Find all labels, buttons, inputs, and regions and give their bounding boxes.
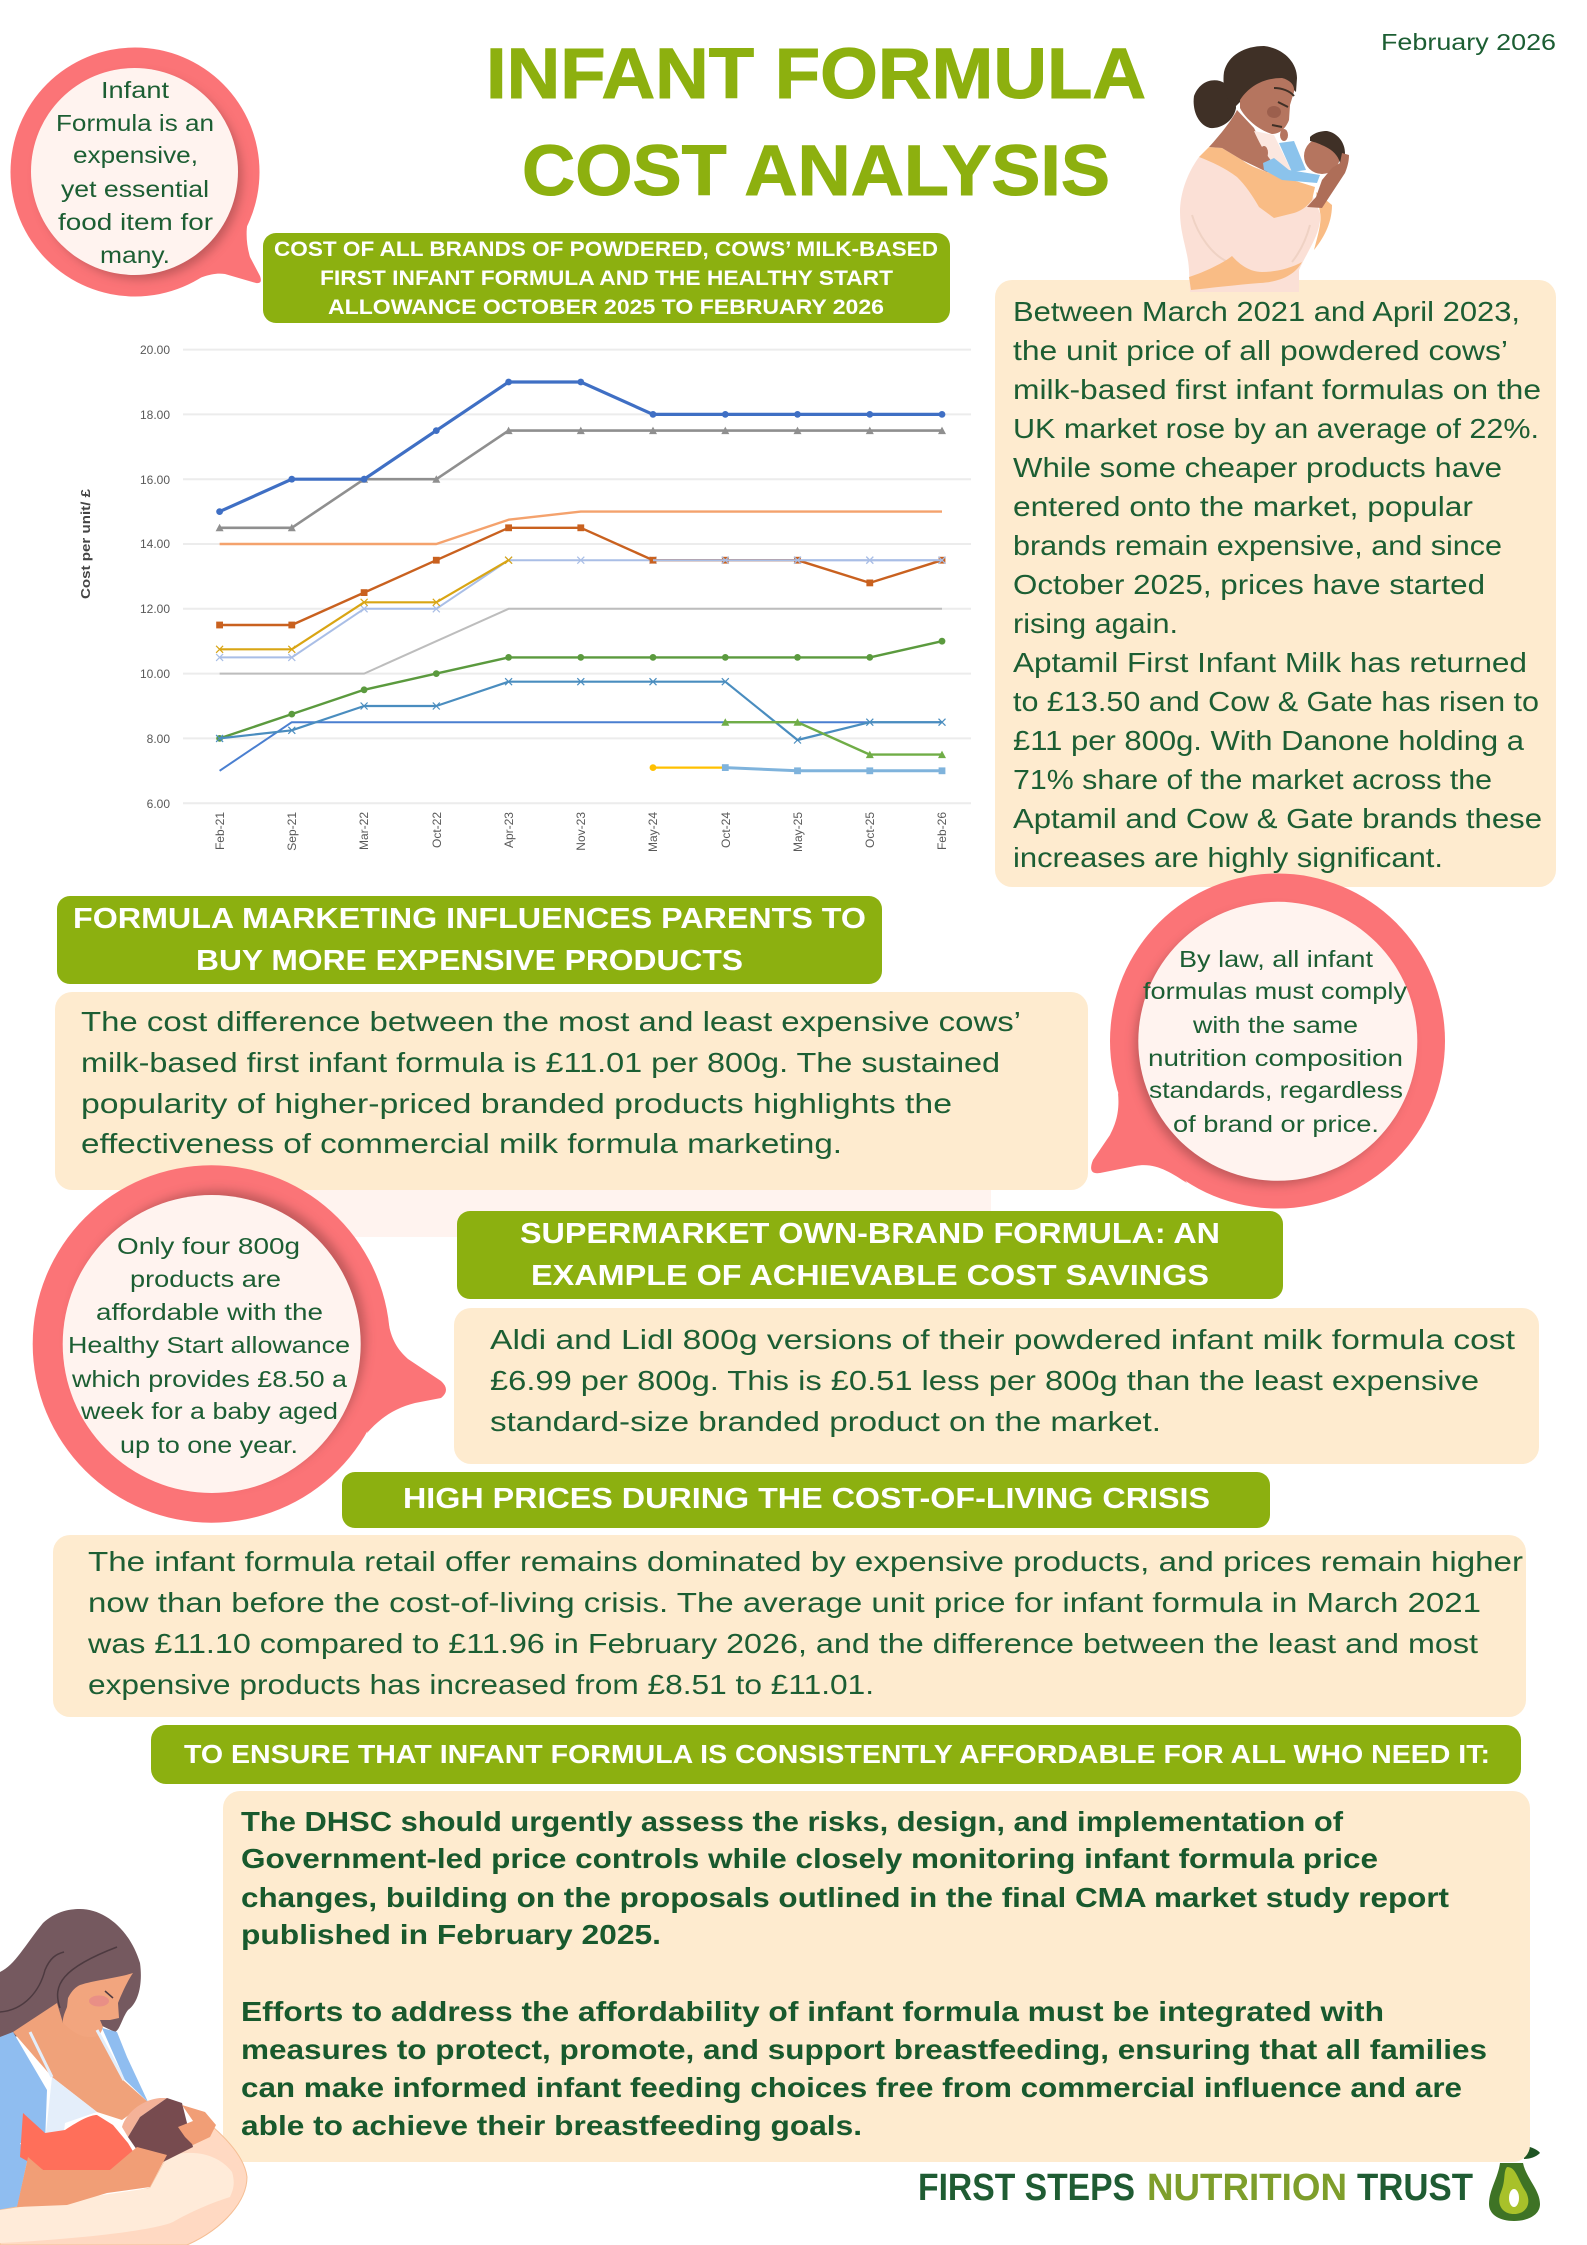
line chart: cost per unit by brand: Cost per unit/ £: [78, 488, 93, 599]
callout: Healthy Start allowance: Only four 800g: [117, 1233, 300, 1259]
callout: Healthy Start allowance: Healthy Start allowance: [68, 1332, 350, 1358]
line chart: cost per unit by brand: [78, 343, 971, 852]
panel: intro text: UK market rose by an average of 22%.: [1013, 413, 1539, 444]
line chart: cost per unit by brand: 12.00: [140, 602, 170, 616]
line chart: cost per unit by brand: 16.00: [140, 473, 170, 487]
callout: Healthy Start allowance: week for a baby aged: [80, 1398, 338, 1424]
panel: recommendations text: can make informed infant feeding choices free from commercial influence and are: [241, 2072, 1462, 2103]
icon: breastfeeding mother: [0, 1909, 247, 2245]
panel: intro text: 71% share of the market across the: [1013, 764, 1492, 795]
line chart: cost per unit by brand: Sep-21: [285, 812, 299, 851]
panel: intro text: the unit price of all powdered cows’: [1013, 335, 1508, 366]
panel: intro text: [995, 280, 1556, 887]
panel: cost difference text: The cost difference between the most and least expensive cows’: [81, 1006, 1021, 1037]
panel: recommendations text: able to achieve their breastfeeding goals.: [241, 2110, 862, 2141]
panel: intro text: milk-based first infant formulas on the: [1013, 374, 1541, 405]
line chart: cost per unit by brand: 8.00: [147, 732, 170, 746]
panel: intro text: Aptamil First Infant Milk has returned: [1013, 647, 1527, 678]
line chart: cost per unit by brand: Oct-25: [863, 812, 877, 848]
line chart: cost per unit by brand: 6.00: [147, 797, 170, 811]
line chart: cost per unit by brand: Apr-23: [502, 812, 516, 848]
panel: retail offer text: now than before the cost-of-living crisis. The average unit price for infant formula in March 2021: [88, 1587, 1481, 1618]
callout: Healthy Start allowance: products are: [130, 1266, 281, 1292]
panel: retail offer text: expensive products has increased from £8.51 to £11.01.: [88, 1669, 874, 1700]
line chart: cost per unit by brand: Oct-22: [430, 812, 444, 848]
callout: infant formula is expensive: food item for: [58, 209, 213, 235]
panel: recommendations text: Efforts to address the affordability of infant formula must be integrated with: [241, 1996, 1384, 2027]
panel: intro text: £11 per 800g. With Danone holding a: [1013, 725, 1524, 756]
callout: Healthy Start allowance: [33, 1165, 446, 1523]
callout: infant formula is expensive: [10, 48, 261, 296]
line chart: cost per unit by brand: 18.00: [140, 408, 170, 422]
icon: mother carrying baby in sling: [1180, 46, 1349, 292]
callout: infant formula is expensive: Formula is an: [56, 110, 214, 136]
line chart: cost per unit by brand: Mar-22: [357, 812, 371, 850]
panel: pale backing strip: [200, 1180, 991, 1237]
panel: intro text: brands remain expensive, and since: [1013, 530, 1502, 561]
callout: by law: [1091, 874, 1445, 1208]
logo: pear icon: [1489, 2163, 1540, 2221]
line chart: cost per unit by brand: Oct-24: [719, 812, 733, 848]
panel: Aldi and Lidl text: Aldi and Lidl 800g versions of their powdered infant milk formula cost: [490, 1324, 1515, 1355]
panel: intro text: to £13.50 and Cow & Gate has risen to: [1013, 686, 1539, 717]
line chart: cost per unit by brand: Feb-26: [935, 812, 949, 850]
panel: Aldi and Lidl text: standard-size branded product on the market.: [490, 1406, 1161, 1437]
line chart: cost per unit by brand: 10.00: [140, 667, 170, 681]
heading: supermarket own-brand: EXAMPLE OF ACHIEVABLE COST SAVINGS: [531, 1260, 1209, 1292]
callout: Healthy Start allowance: affordable with the: [96, 1299, 323, 1325]
title: INFANT FORMULA: [486, 35, 1146, 114]
panel: recommendations text: published in February 2025.: [241, 1919, 661, 1950]
line chart: cost per unit by brand: 14.00: [140, 537, 170, 551]
line chart: cost per unit by brand: May-24: [646, 812, 660, 852]
logo: First Steps Nutrition Trust wordmark: FIRST STEPS: [918, 2167, 1135, 2209]
heading: supermarket own-brand: SUPERMARKET OWN-BRAND FORMULA: AN: [520, 1218, 1220, 1250]
heading: formula marketing: FORMULA MARKETING INFLUENCES PARENTS TO: [73, 903, 866, 935]
heading: recommendations: [151, 1725, 1521, 1784]
panel: intro text: Between March 2021 and April 2023,: [1013, 296, 1520, 327]
panel: intro text: increases are highly significant.: [1013, 842, 1443, 873]
callout: infant formula is expensive: many.: [100, 242, 170, 268]
heading: chart title: ALLOWANCE OCTOBER 2025 TO FEBRUARY 2026: [328, 296, 884, 319]
callout: Healthy Start allowance: which provides £8.50 a: [71, 1366, 347, 1392]
panel: intro text: October 2025, prices have started: [1013, 569, 1485, 600]
heading: cost-of-living crisis: HIGH PRICES DURING THE COST-OF-LIVING CRISIS: [403, 1483, 1210, 1515]
callout: by law: nutrition composition: [1148, 1045, 1403, 1071]
panel: intro text: Aptamil and Cow & Gate brands these: [1013, 803, 1542, 834]
panel: cost difference text: popularity of higher-priced branded products highlights the: [81, 1088, 952, 1119]
panel: recommendations text: changes, building on the proposals outlined in the final CMA market study report: [241, 1882, 1449, 1913]
panel: recommendations text: [223, 1791, 1530, 2162]
title: [486, 35, 1146, 211]
panel: recommendations text: Government-led price controls while closely monitoring infant formula price: [241, 1843, 1378, 1874]
callout: by law: By law, all infant: [1179, 946, 1374, 972]
panel: Aldi and Lidl text: [454, 1308, 1539, 1464]
logo: First Steps Nutrition Trust wordmark: [918, 2167, 1473, 2209]
line chart: cost per unit by brand: 20.00: [140, 343, 170, 357]
callout: by law: formulas must comply: [1143, 978, 1408, 1004]
panel: intro text: While some cheaper products have: [1013, 452, 1502, 483]
line chart: cost per unit by brand: Feb-21: [213, 812, 227, 850]
line chart: cost per unit by brand: Nov-23: [574, 812, 588, 851]
panel: retail offer text: The infant formula retail offer remains dominated by expensive products, and prices remain higher: [88, 1546, 1523, 1577]
panel: cost difference text: [55, 992, 1088, 1190]
heading: formula marketing: BUY MORE EXPENSIVE PRODUCTS: [196, 945, 743, 977]
panel: intro text: entered onto the market, popular: [1013, 491, 1473, 522]
date: February 2026: [1381, 29, 1556, 55]
callout: by law: with the same: [1192, 1012, 1358, 1038]
callout: infant formula is expensive: yet essential: [61, 176, 209, 202]
panel: recommendations text: The DHSC should urgently assess the risks, design, and implementation of: [241, 1806, 1344, 1837]
panel: retail offer text: was £11.10 compared to £11.96 in February 2026, and the difference between the least and most: [87, 1628, 1478, 1659]
heading: recommendations: TO ENSURE THAT INFANT FORMULA IS CONSISTENTLY AFFORDABLE FOR ALL WHO NEED IT:: [184, 1739, 1490, 1769]
logo: First Steps Nutrition Trust wordmark: NUTRITION: [1147, 2167, 1347, 2209]
panel: cost difference text: effectiveness of commercial milk formula marketing.: [81, 1128, 842, 1159]
heading: chart title: [263, 233, 950, 323]
callout: by law: standards, regardless: [1149, 1077, 1403, 1103]
callout: infant formula is expensive: Infant: [101, 77, 170, 103]
heading: chart title: FIRST INFANT FORMULA AND THE HEALTHY START: [320, 267, 893, 290]
callout: infant formula is expensive: expensive,: [73, 142, 198, 168]
title: COST ANALYSIS: [522, 132, 1110, 211]
heading: chart title: COST OF ALL BRANDS OF POWDERED, COWS’ MILK-BASED: [274, 238, 938, 261]
callout: Healthy Start allowance: up to one year.: [120, 1432, 298, 1458]
panel: Aldi and Lidl text: £6.99 per 800g. This is £0.51 less per 800g than the least expensive: [490, 1365, 1479, 1396]
panel: retail offer text: [53, 1535, 1526, 1717]
heading: cost-of-living crisis: [342, 1472, 1270, 1528]
heading: supermarket own-brand: [457, 1211, 1283, 1299]
panel: intro text: rising again.: [1013, 608, 1178, 639]
line chart: cost per unit by brand: May-25: [791, 812, 805, 852]
callout: by law: of brand or price.: [1173, 1111, 1379, 1137]
logo: First Steps Nutrition Trust wordmark: TRUST: [1357, 2167, 1473, 2209]
panel: cost difference text: milk-based first infant formula is £11.01 per 800g. The sustained: [81, 1047, 1000, 1078]
heading: formula marketing: [57, 896, 882, 984]
panel: recommendations text: measures to protect, promote, and support breastfeeding, ensuring that all families: [241, 2034, 1487, 2065]
logo: leaf: [1522, 2145, 1540, 2159]
